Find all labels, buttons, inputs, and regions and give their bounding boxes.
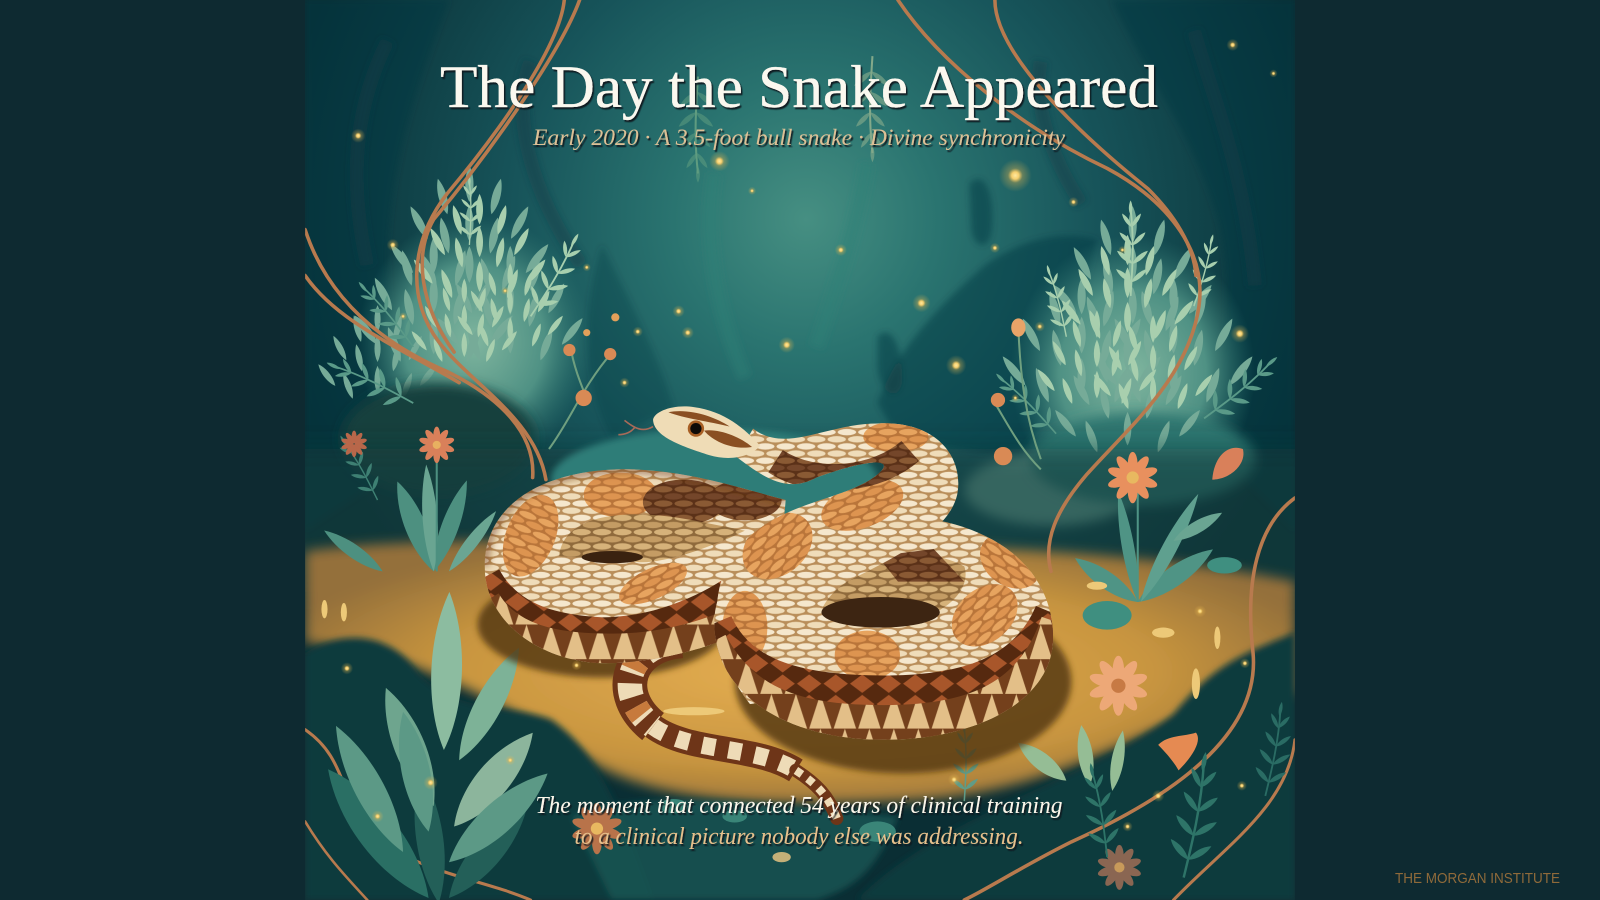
bush left: [318, 168, 582, 462]
caption line 2: to a clinical picture nobody else was addressing.: [574, 824, 1024, 850]
footer brand: THE MORGAN INSTITUTE: [1395, 871, 1560, 887]
copper vines: [305, 0, 1295, 900]
foreground leaves left: [328, 592, 548, 900]
bush right: [964, 200, 1289, 526]
infographic canvas: [305, 0, 1560, 900]
foreground plants right: [951, 699, 1300, 882]
snake: [480, 406, 1061, 818]
front coil belly scales: [710, 612, 1058, 722]
back coil: [484, 469, 786, 664]
teal mound behind snake: [548, 428, 879, 514]
caption line 1: The moment that connected 54 years of clinical training: [536, 793, 1062, 819]
soft trunks: [518, 62, 1084, 373]
forest background: [364, 0, 1249, 546]
sandy ground: [305, 541, 1295, 803]
s-curve body: [717, 423, 958, 704]
left mid plants: [324, 436, 496, 572]
snake shadow: [478, 571, 1071, 773]
subtitle: Early 2020 · A 3.5-foot bull snake · Divine synchronicity: [532, 125, 1066, 150]
dark foreground corners: [305, 633, 1295, 900]
title: The Day the Snake Appeared: [440, 54, 1158, 120]
tail: [630, 641, 837, 818]
dark ground plants band: [286, 449, 1316, 592]
hanging leaves at top: [677, 56, 890, 183]
snake head: [618, 406, 760, 458]
right mid plants: [1075, 492, 1222, 602]
ground specks: [321, 557, 1242, 862]
fireflies: [341, 39, 1278, 832]
small stem flowers: [549, 313, 1041, 469]
dark tree silhouettes: [590, 5, 1203, 451]
flowers: [341, 427, 1243, 890]
illustration: snake in forest clearing: [286, 0, 1316, 900]
front coil: [714, 521, 1053, 740]
